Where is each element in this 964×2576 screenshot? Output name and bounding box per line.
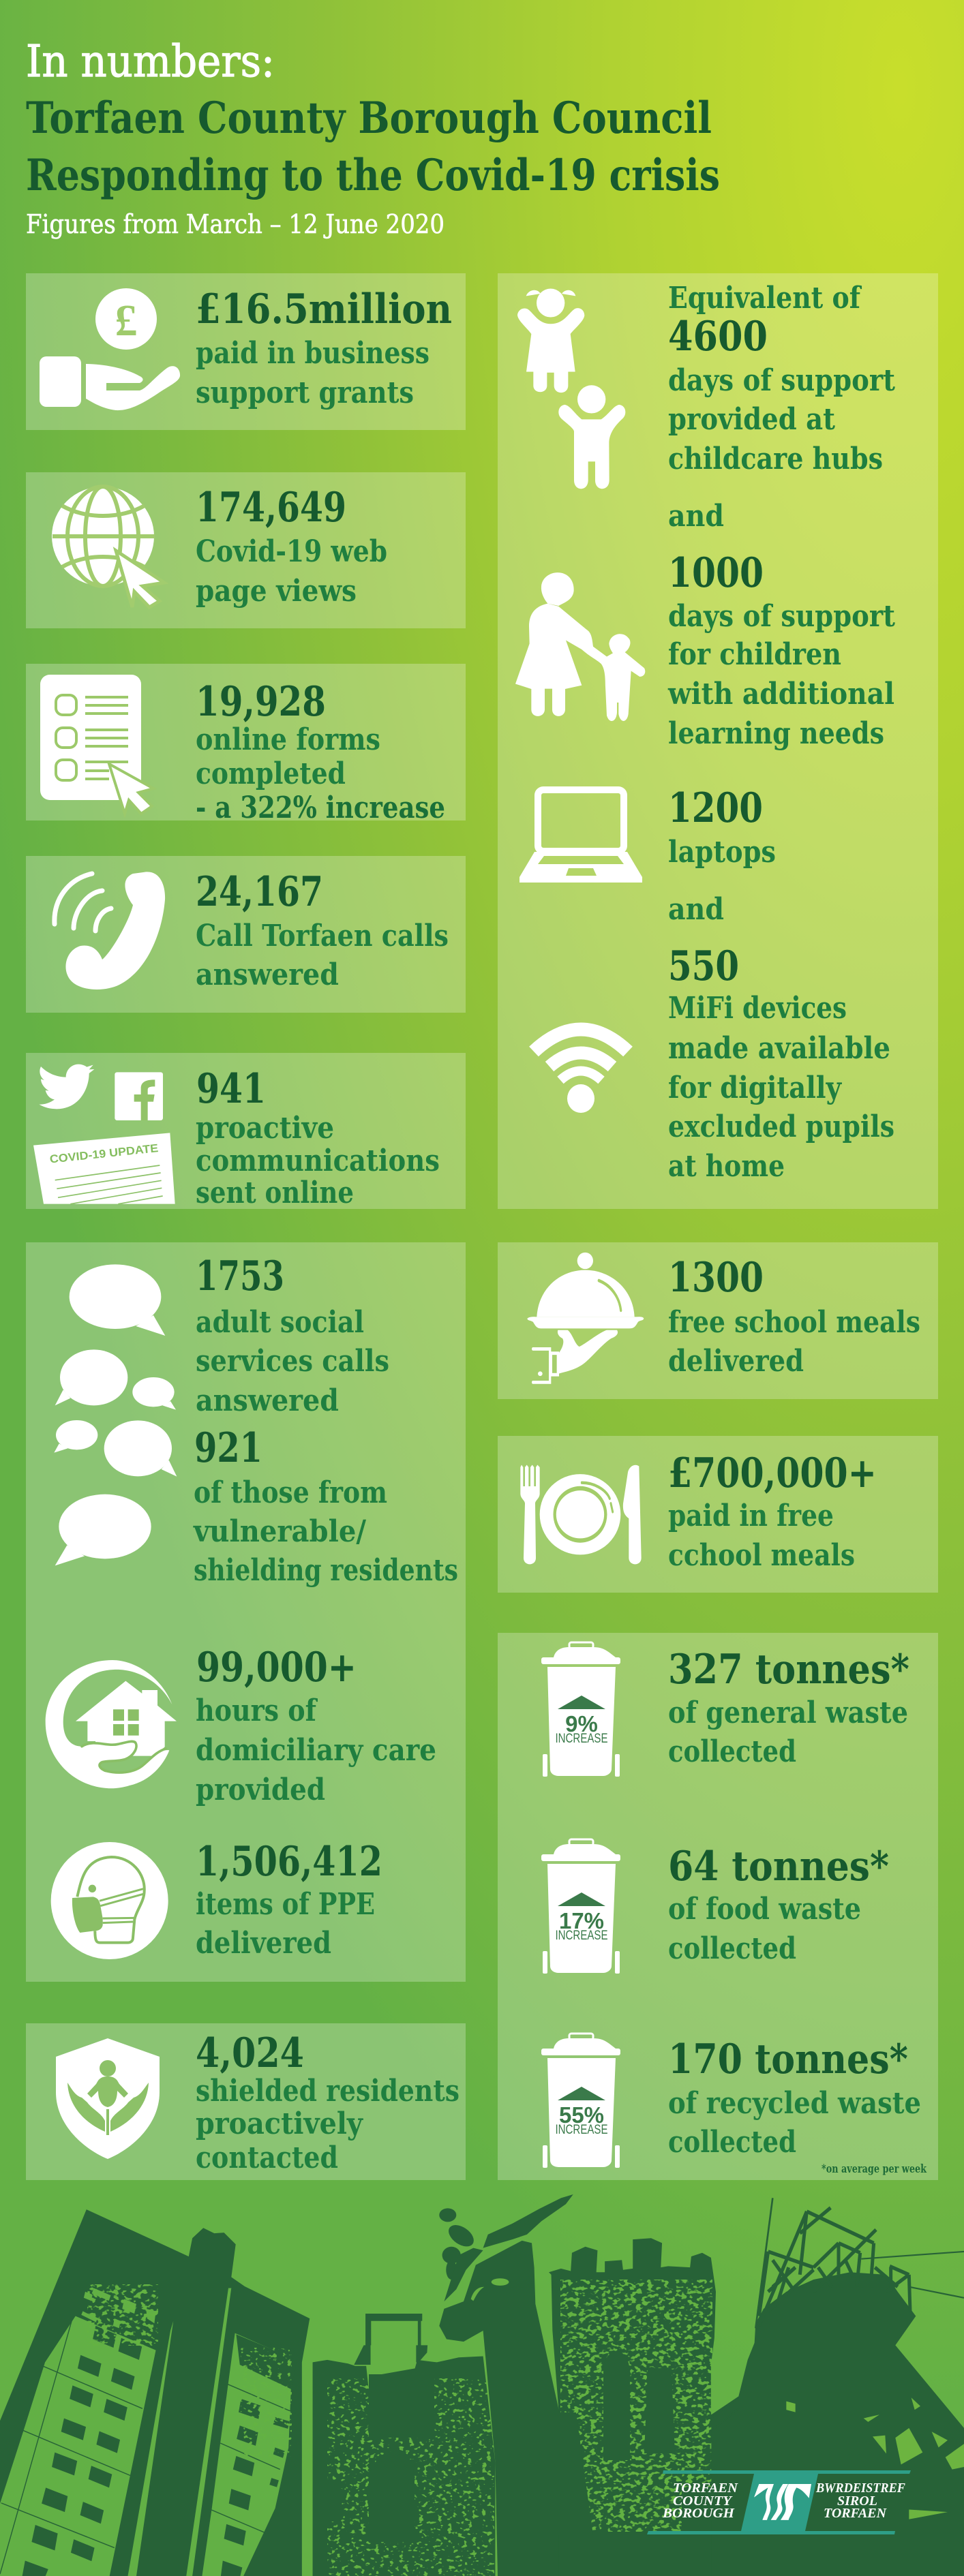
panel: childcare and digital support [498,273,938,1209]
stat: 16.5 million: support grants [196,375,414,410]
stat: additional learning needs: learning needs [668,716,884,751]
tower blocks [0,2209,310,2576]
stat: ppe [196,1838,382,1961]
stat: shielded residents: contacted [196,2141,338,2175]
stat: forms [196,678,445,825]
stat: communications: proactive [196,1111,334,1146]
icon: hand carrying cloche [527,1253,644,1382]
stat: communications: sent online [196,1176,354,1210]
castle tower [549,2238,723,2576]
heading: council: Torfaen County Borough Council [26,93,712,144]
stat: general waste: of general waste [668,1696,908,1730]
stat: meals delivered: free school meals [668,1305,920,1340]
icon: hand holding pound coin: £ [115,296,138,346]
stat: childcare hubs: days of support [668,363,896,398]
stat: ppe: delivered [196,1926,331,1961]
stat: food waste: of food waste [668,1892,861,1927]
colliery pithead [711,2198,964,2576]
stat: social services calls: vulnerable/ [193,1514,367,1549]
icon: form with cursor [40,675,153,814]
stat: childcare hubs: 4600 [668,313,768,361]
panel: online forms [26,664,466,825]
stat: meals delivered: 1300 [668,1254,764,1302]
stat: social services calls: adult social [196,1305,364,1340]
stat: recycled waste: 170 tonnes* [668,2036,908,2083]
stat: recycled waste [668,2036,921,2160]
stat: social services calls: 1753 [196,1253,284,1300]
stat: calls [196,868,449,992]
stat: mifi devices: 550 [668,942,739,990]
icon: bin 17 percent increase: INCREASE [555,1929,608,1943]
stat: food waste: 64 tonnes* [668,1843,889,1890]
stat: ppe: items of PPE [196,1887,375,1922]
subtitle: date range: Figures from March – 12 June 2020 [26,209,445,239]
stat: social services calls: shielding residents [194,1553,458,1588]
stat: domiciliary care: hours of [196,1693,318,1728]
stat: additional learning needs: days of support [668,599,896,634]
stat: mifi devices: for digitally [668,1071,842,1105]
icon: head wearing face mask [51,1842,168,1959]
logo text: english: TORFAEN [673,2481,739,2496]
stat: shielded residents: shielded residents [196,2074,460,2109]
stat: additional learning needs [667,549,896,751]
stat: general waste: collected [668,1734,796,1769]
stat: laptops [668,784,776,927]
icon: bin 17 percent increase: 17% [559,1908,604,1933]
stat: communications: communications [196,1144,440,1178]
panel: shielded residents [26,2023,466,2180]
panel: proactive communications [26,1053,466,1210]
stat: calls: 24,167 [196,868,323,916]
stat: domiciliary care [196,1644,436,1807]
icon: hand holding pound coin [40,288,180,410]
icon: bin 55 percent increase [541,2034,620,2168]
stat: web views [196,484,387,609]
stat: meals funding: £700,000+ [668,1450,877,1497]
heading: in numbers: In numbers: [26,36,275,87]
stat: shielded residents: proactively [196,2106,363,2141]
stat: calls: Call Torfaen calls [196,919,449,953]
stat: mifi devices: MiFi devices [668,991,847,1026]
icon: house in caring hand [46,1660,177,1788]
stat: mifi devices: made available [668,1031,890,1066]
stat: forms: online forms [196,722,380,757]
stat: general waste: 327 tonnes* [668,1646,909,1693]
stat: additional learning needs: 1000 [668,549,764,597]
icon: bin 9 percent increase: 9% [565,1711,598,1736]
icon: children and mother [515,288,645,721]
stat: shielded residents: 4,024 [196,2029,304,2077]
stat: laptops: and [668,892,724,927]
stat: 16.5 million: paid in business [196,336,430,371]
stat: domiciliary care: 99,000+ [196,1644,357,1691]
stat: web views: 174,649 [196,484,346,532]
icon: bin 17 percent increase [541,1839,620,1974]
stat: additional learning needs: with additional [667,677,894,711]
stat: childcare hubs: and [668,499,724,534]
icon: wifi signal [534,1029,628,1113]
logo mark: stylised T and river [754,2484,811,2520]
logo text: welsh [815,2481,906,2521]
icon: bin 9 percent increase: INCREASE [555,1732,608,1746]
logo text: english: BOROUGH [662,2506,736,2521]
stat: food waste [668,1843,889,1966]
panel: business grants [26,273,466,430]
stat: laptops: laptops [668,835,776,870]
stat: communications [196,1065,440,1210]
title block [26,36,720,239]
heading: responding: Responding to the Covid-19 crisis [26,150,720,201]
stat: web views: page views [196,574,357,609]
stat: mifi devices: excluded pupils [668,1109,894,1144]
stat: shielded residents [196,2029,460,2175]
logo text: welsh: BWRDEISTREF [815,2481,906,2496]
stat: forms: completed [196,756,346,791]
dragon statue [439,2194,578,2576]
building speckle [87,2284,158,2346]
logo text: english: COUNTY [673,2494,733,2509]
stat: forms: 19,928 [196,678,326,726]
stat: social services calls: answered [196,1383,339,1418]
logo text: welsh: TORFAEN [824,2506,888,2521]
logo: torfaen county borough [647,2470,911,2534]
icon: bin 55 percent increase: INCREASE [555,2123,608,2137]
logo text: english [662,2481,739,2521]
icon: plate with cutlery [520,1465,642,1564]
logo text: welsh: SIROL [837,2494,877,2509]
tower speckle [241,2348,292,2457]
stat: additional learning needs: for children [668,637,841,672]
stat: communications: 941 [196,1065,266,1113]
icon: social media and news update: COVID-19 UPDATE [49,1141,159,1166]
stat: general waste [668,1646,909,1769]
panel: waste collection [498,1633,938,2180]
stat: 16.5 million [196,286,452,410]
stat: meals funding: paid in free [668,1499,834,1533]
stat: social services calls: of those from [194,1475,387,1510]
stat: web views: Covid-19 web [196,534,387,569]
stat: childcare hubs: Equivalent of [668,281,862,316]
panel: social care [26,1242,466,1982]
stat: domiciliary care: provided [196,1773,325,1807]
icon: bin 55 percent increase: 55% [559,2102,604,2128]
panel: web page views [26,472,466,628]
stat: laptops: 1200 [668,784,763,832]
stat: mifi devices [668,942,894,1184]
stat: childcare hubs: provided at [668,402,836,437]
stat: domiciliary care: domiciliary care [196,1733,436,1768]
stat: food waste: collected [668,1931,796,1966]
stat: childcare hubs: childcare hubs [668,442,883,476]
icon: social media and news update [33,1064,175,1204]
stat: recycled waste: of recycled waste [668,2086,921,2121]
stat: childcare hubs [668,281,896,534]
stat: meals funding: cchool meals [668,1538,855,1573]
panel: school meals paid [498,1436,938,1593]
stat: 16.5 million: £16.5million [196,286,452,333]
icon: laptop [519,790,642,883]
stat: recycled waste: collected [668,2125,796,2160]
icon: shield with person and hands [56,2038,160,2159]
stat: social services calls [193,1253,458,1588]
stat: meals funding [668,1450,877,1573]
gatehouse [313,2314,495,2576]
icon: globe with cursor [52,487,164,607]
stat: meals delivered [668,1254,920,1379]
stat: forms: - a 322% increase [196,791,445,825]
icon: bin 9 percent increase [541,1642,620,1777]
stat: social services calls: 921 [194,1424,262,1472]
icon: telephone handset [55,872,165,990]
stat: ppe: 1,506,412 [196,1838,382,1886]
stat: meals delivered: delivered [668,1344,804,1379]
panel: school meals delivered [498,1242,938,1399]
stat: calls: answered [196,957,339,992]
icon: speech bubbles [54,1264,177,1565]
panel: call torfaen [26,856,466,1013]
footnote: *on average per week [822,2162,927,2176]
skyline illustration [0,2194,964,2576]
stat: mifi devices: at home [668,1149,785,1184]
stat: social services calls: services calls [196,1344,389,1379]
